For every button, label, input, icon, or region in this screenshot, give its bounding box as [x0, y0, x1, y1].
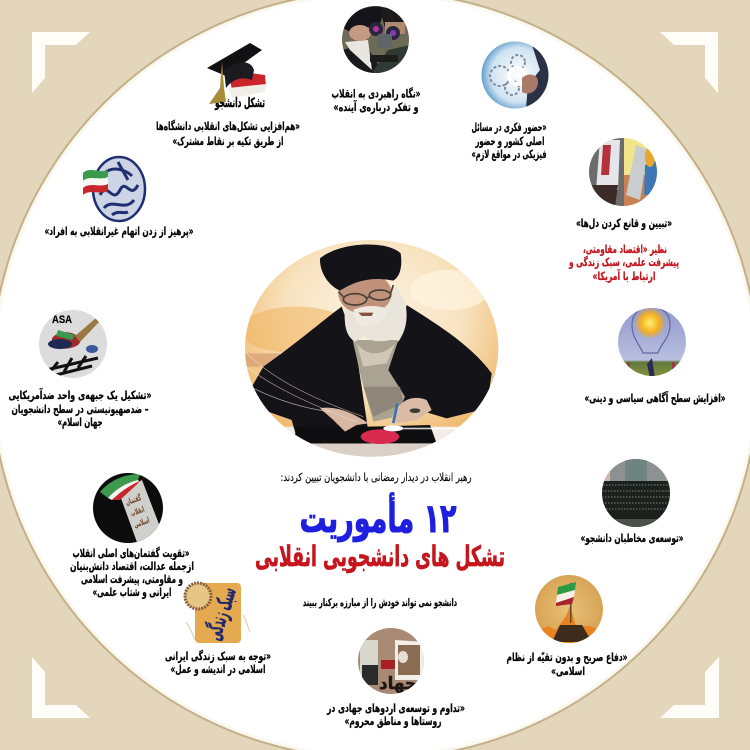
item: explaining and persuading [568, 135, 679, 283]
icon: light bulb [618, 308, 686, 376]
label: «حضور فکری در مسائل [472, 120, 546, 135]
label: جهان اسلام» [58, 415, 102, 429]
label: «توسعه‌ی مخاطبان دانشجو» [580, 531, 684, 546]
label [332, 86, 420, 115]
icon: dog tag: انقلاب [129, 505, 146, 518]
label: و تفکر درباره‌ی آینده» [334, 100, 418, 115]
icon: guitar poster [39, 310, 107, 378]
label: ازجمله عدالت، اقتصاد دانش‌بنیان [70, 559, 194, 573]
subtitle: تشکل های دانشجویی انقلابی [255, 540, 505, 573]
icon: persuading collage [589, 138, 657, 206]
tagline: دانشجو نمی تواند خودش را از مبارزه برکنار ببیند [303, 597, 457, 609]
caption: رهبر انقلاب در دیدار رمضانی با دانشجویان تبیین کردند: [280, 471, 472, 484]
label [326, 701, 465, 729]
red note [568, 242, 679, 283]
label: «تشکیل یک جبهه‌ی واحد ضدآمریکایی [8, 388, 152, 403]
item: defending the system [506, 573, 628, 678]
central portrait [240, 237, 503, 463]
label: اسلامی در اندیشه و عمل» [170, 662, 266, 677]
icon: flag on mound [535, 575, 603, 643]
label: از طریق تکیه بر نقاط مشترک» [172, 134, 284, 148]
label [8, 388, 152, 429]
label [472, 120, 546, 162]
icon: binoculars [342, 6, 409, 73]
label [156, 119, 300, 148]
label: «هم‌افزایی تشکل‌های انقلابی دانشگاه‌ها [156, 119, 300, 133]
item: lifestyle [165, 583, 271, 677]
label: روستاها و مناطق محروم» [344, 714, 442, 729]
label [506, 650, 628, 678]
label: «توجه به سبک زندگی ایرانی [165, 649, 271, 664]
title: 12 missions: ۱۲ مأموریت [300, 492, 456, 542]
icon: crowd [602, 459, 670, 527]
red note: پیشرفت علمی، سبک زندگی و [568, 255, 679, 270]
label: – ضدصهیونیستی در سطح دانشجویان [12, 402, 149, 417]
label: «پرهیز از زدن اتهام غیرانقلابی به افراد» [44, 224, 194, 238]
icon: gears [482, 42, 548, 108]
infographic canvas: سبک زندگی [199, 584, 242, 643]
item: intellectual presence [472, 40, 552, 162]
item: synergy of student organisations [156, 43, 300, 148]
label: فیزیکی در مواقع لازم» [472, 147, 546, 162]
label [70, 546, 194, 600]
label: «تداوم و توسعه‌ی اردوهای جهادی در [326, 701, 465, 716]
icon: dog tag: گفتمان [124, 492, 143, 507]
label: و مقاومتی، پیشرفت اسلامی [81, 572, 183, 587]
red note: نظیر «اقتصاد مقاومتی، [583, 242, 667, 257]
icon: dog tag: اسلامی [133, 516, 151, 530]
icon: dog tag [93, 473, 163, 543]
label [165, 649, 271, 677]
label: «تبیین و قانع کردن دل‌ها» [576, 216, 672, 231]
item: forward looking [332, 5, 420, 115]
item: jihadi camps [326, 626, 465, 729]
label: ایرانی و شتاب علمی» [92, 585, 172, 600]
label: اسلامی» [551, 664, 585, 678]
label: «دفاع صریح و بدون تقیّه از نظام [506, 650, 628, 665]
item: anti-American front [8, 308, 152, 429]
item: student audience [580, 457, 684, 546]
item: raising awareness [584, 306, 726, 406]
icon: seal with flag [83, 157, 145, 221]
label: «نگاه راهبردی به انقلاب [332, 86, 420, 100]
red note: ارتباط با آمریکا» [592, 269, 656, 283]
label: اصلی کشور و حضور [475, 134, 544, 149]
item: avoid accusations [44, 157, 194, 238]
item: revolutionary discourses [70, 470, 194, 600]
icon: guitar poster: ASA [52, 314, 72, 326]
icon: graduation cap [207, 43, 266, 111]
icon: jihad photo: جهاد [379, 674, 417, 694]
icon: graduation cap: تشکل دانشجو [214, 96, 265, 111]
label: «تقویت گفتمان‌های اصلی انقلاب [72, 546, 190, 561]
